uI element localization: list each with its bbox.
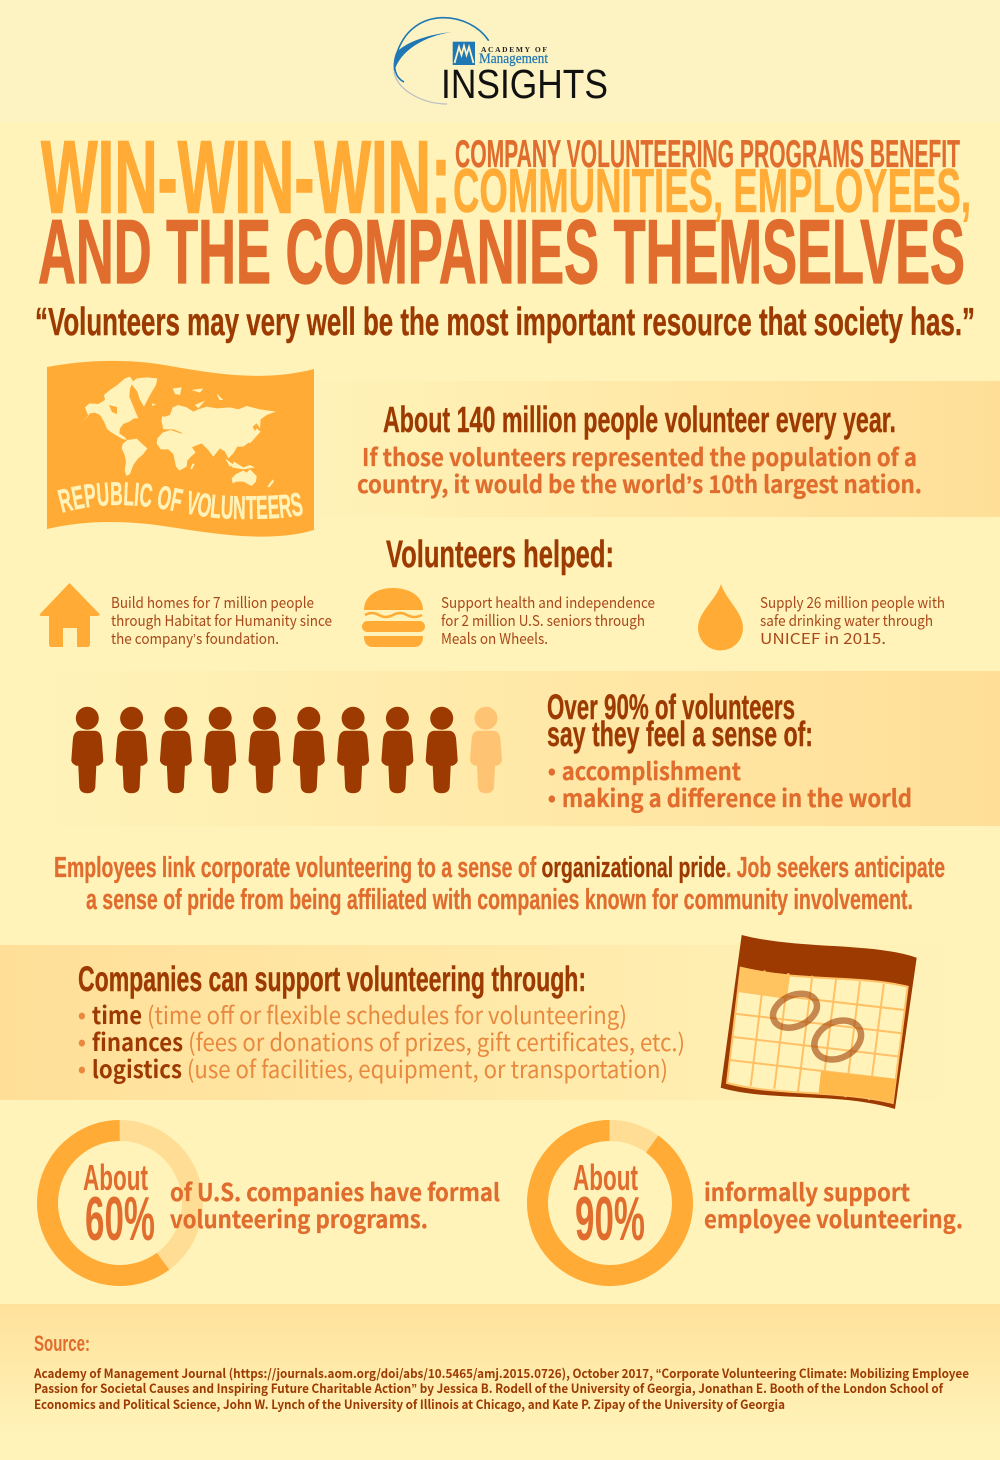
text: meals: [441, 592, 655, 649]
stat: over 90%: [547, 688, 912, 814]
text: homes: [111, 592, 332, 649]
donut: 60%: About: [83, 1157, 148, 1198]
text: homes: through Habitat for Humanity since: [111, 610, 332, 631]
stat: over 90%: • accomplishment: [548, 752, 741, 787]
text: companies can support: • finances (fees or donations of prizes, gift certificates, etc.): [78, 1023, 685, 1058]
band: 140 million: [300, 381, 1000, 517]
donut: 90%: 90%: [575, 1185, 645, 1254]
stat: 140 million: If those volunteers represented the population of a: [362, 438, 917, 473]
band: companies support: [0, 945, 960, 1100]
band: source: [0, 1304, 1000, 1460]
icon: house: [40, 583, 100, 647]
text: companies can support: • logistics (use of facilities, equipment, or transportation): [78, 1050, 668, 1085]
source: Economics and Political Science, John W. Lynch of the University of Illinois at Chicago, and Kate P. Zipay of the University of Georgia: [34, 1394, 785, 1413]
logo: Management: [479, 51, 549, 67]
source: Passion for Societal Causes and Inspiring Future Charitable Action” by Jessica B. Rodell of the University of Georgia, Jonathan E. Booth of the London School of: [34, 1378, 944, 1397]
donut: 60%: [19, 1102, 221, 1304]
icon: calendar: [721, 935, 917, 1109]
text: water: [760, 592, 945, 649]
logo: [394, 18, 608, 107]
flag: republic of volunteers: REPUBLIC OF VOLUNTEERS: [57, 482, 303, 520]
stat: 140 million: country, it would be the world’s 10th largest nation.: [357, 465, 922, 500]
text: water: UNICEF in 2015.: [760, 628, 886, 649]
text: organizational pride: [54, 852, 945, 916]
text: 90% label: employee volunteering.: [704, 1200, 963, 1235]
title: WIN-WIN-WIN:: [41, 120, 451, 234]
text: 90% label: informally support: [704, 1173, 910, 1208]
stat: 140 million: [357, 399, 922, 500]
logo: ACADEMY OF: [481, 45, 547, 54]
pictogram: 9 of 10 people: [71, 707, 502, 793]
stat: over 90%: say they feel a sense of:: [547, 715, 813, 754]
hudson bay: [109, 405, 117, 414]
icon: water drop: [698, 584, 743, 650]
text: 60% label: [170, 1173, 500, 1235]
text: water: safe drinking water through: [760, 610, 933, 631]
text: meals: for 2 million U.S. seniors through: [441, 610, 645, 631]
text: 60% label: volunteering programs.: [170, 1200, 428, 1235]
stat: over 90%: • making a difference in the world: [548, 779, 912, 814]
text: homes: the company’s foundation.: [111, 628, 279, 649]
text: companies can support: • time (time off or flexible schedules for volunteering): [78, 996, 627, 1031]
text: meals: Support health and independence: [441, 592, 655, 613]
text: companies can support: [78, 960, 685, 1085]
world map: [82, 377, 276, 487]
icon: burger: [362, 588, 425, 647]
text: homes: Build homes for 7 million people: [111, 592, 314, 613]
text: meals: Meals on Wheels.: [441, 628, 548, 649]
source: [33, 1331, 969, 1413]
text: water: Supply 26 million people with: [760, 592, 945, 613]
stat: over 90%: Over 90% of volunteers: [547, 688, 795, 727]
flag: republic of volunteers: [47, 360, 314, 537]
title: [38, 120, 971, 303]
text: 60% label: of U.S. companies have formal: [170, 1173, 500, 1208]
source: Academy of Management Journal (https://journals.aom.org/doi/abs/10.5465/amj.2015.0726), October 2017, “Corporate Volunteering Climate: Mobilizing Employee: [33, 1363, 969, 1382]
calendar rings: [768, 987, 868, 1067]
text: companies can support: Companies can support volunteering through:: [78, 960, 586, 999]
source: Source:: [34, 1331, 90, 1356]
donut: 60%: 60%: [85, 1185, 155, 1254]
header band: [0, 0, 1000, 122]
band: over 90%: [40, 671, 1000, 826]
heading: volunteers helped: Volunteers helped:: [386, 534, 614, 576]
logo: INSIGHTS: [441, 61, 608, 107]
text: 90% label: [704, 1173, 963, 1235]
donut: 90%: [509, 1102, 711, 1304]
donut: 90%: About: [573, 1157, 638, 1198]
